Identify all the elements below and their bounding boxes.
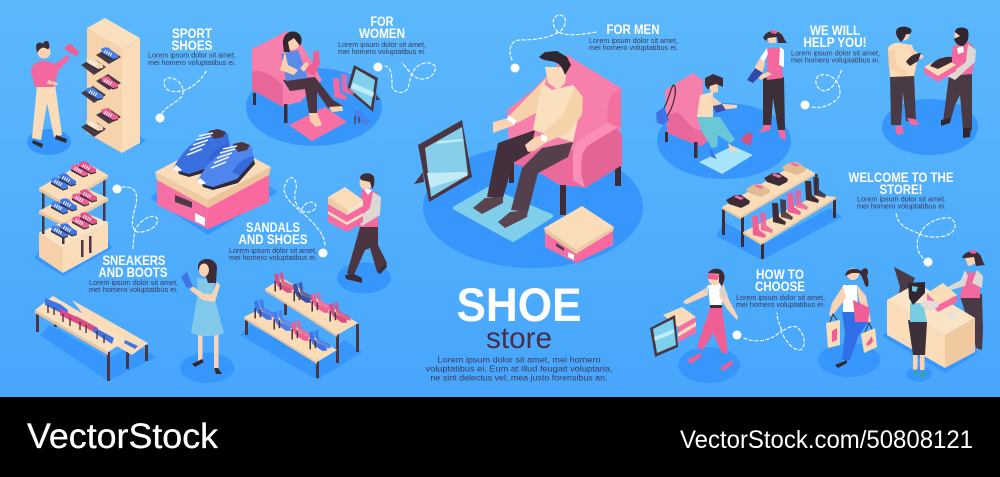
panel: woman trying shoes with assistant [656,30,791,179]
title: SHOE [456,278,582,331]
heading: sneakers and boots [89,253,178,294]
panel: display table with heels [240,272,362,380]
woman seated [280,31,343,127]
rug [455,189,551,240]
panel: sneakers on box [150,129,278,235]
dashed connector: sandals and shoes [284,178,328,258]
cabinet [39,212,108,273]
sales assistant [946,250,985,350]
title: store [486,322,552,355]
heading: for women: mei homero voluptatibus ei. [338,47,426,56]
heading: sneakers and boots: mei homero voluptatibus ei. [89,285,178,294]
dashed connector: for women [374,62,435,92]
heading: welcome to the store: Lorem ipsum dolor sit amet, [857,194,946,204]
brand name: VectorStock [27,417,219,456]
dashed connector: how to choose [732,313,804,350]
dashed connector: for men [510,15,597,72]
panel: checkout counter [882,250,985,382]
dashed connector: sneakers and boots [112,184,157,249]
heading: for women [338,14,426,56]
heading: for men: Lorem ipsum dolor sit amet, [589,36,678,45]
panel: sandals and shoes heading: SANDALS [246,220,300,235]
heading: sport shoes: Lorem ipsum dolor sit amet, [148,50,236,60]
heading: how to choose: mei homero voluptatibus ei. [736,300,825,309]
salesman [941,28,976,138]
heading: we will help you: WE WILL [810,23,860,38]
panel: display table with sandals (left) [35,296,157,381]
heading: sport shoes: SHOES [172,38,212,53]
woman [683,269,738,371]
panel: shoe display rack (right) [716,162,842,260]
panel: two men with shoe box [882,27,978,155]
seated woman [697,74,740,159]
heading: how to choose: Lorem ipsum dolor sit amet, [736,293,825,302]
woman [31,41,79,148]
armchair [507,55,622,215]
heading: for women: FOR [370,14,394,29]
heading: welcome to the store: mei homero voluptatibus ei. [857,202,946,210]
panel: woman in armchair [246,31,382,146]
heading: sport shoes: mei homero voluptatibus ei. [148,58,236,67]
image reference: VectorStock.com/50808121 [680,426,973,454]
heading: welcome to the store: WELCOME TO THE [848,170,954,185]
dashed connector: we will help you [800,69,842,110]
counter [887,283,975,368]
mat [289,107,347,141]
panel: woman at sport shoes shelf [27,18,146,155]
panel: shopper with bags [818,268,880,377]
panel: sandals and shoes heading: AND SHOES [238,232,308,247]
heading: sport shoes: SPORT [172,26,213,41]
armchair [665,73,712,158]
register [894,267,915,303]
mirror [414,120,472,202]
dashed connector: welcome [896,213,955,266]
heading: sneakers and boots: Lorem ipsum dolor sit amet, [89,278,178,287]
heading: we will help you [791,23,880,64]
title [456,278,582,355]
armchair [252,31,322,123]
open shoe box [924,57,956,82]
customer [908,282,940,378]
dashed connector: sport shoes [156,70,207,122]
icon: sneakers [173,129,255,190]
panel: sandals and shoes heading: Lorem ipsum dolor sit amet, [229,246,317,255]
heading: we will help you: mei homero voluptatibus ei. [791,56,880,64]
panel: man in armchair (central) [414,51,643,268]
shoe box on counter [927,283,957,312]
heading: how to choose: HOW TO [756,267,804,282]
heading: for women: Lorem ipsum dolor sit amet, [338,40,426,49]
heading: we will help you: Lorem ipsum dolor sit amet, [791,48,880,58]
heading: we will help you: HELP YOU! [804,35,866,50]
panel: sandals and shoes heading [229,220,317,262]
shop assistant [747,30,787,140]
description text [426,354,612,382]
panel: woman at mirror choosing shoes [650,269,740,383]
customer [888,27,924,135]
footer: watermark bar [0,397,1000,477]
heading: for men: mei homero voluptatibus ei. [589,43,678,52]
heading: how to choose [736,267,825,309]
shoe boxes [663,307,696,342]
icon: handbag [656,85,675,125]
description text: ne sint delectus vel, mea justo forensibus an. [430,372,608,382]
man [345,173,387,283]
heading: for men: FOR MEN [606,22,660,37]
description text: Lorem ipsum dolor sit amet, mei homero [438,354,601,364]
mirror [650,315,678,357]
heading: for men [589,22,678,52]
heading: sneakers and boots: SNEAKERS [102,253,166,268]
description text: voluptatibus ei. Eum at illud feugait voluptaria, [426,364,612,374]
heading: welcome to the store [848,170,954,210]
card terminal [945,311,958,320]
mirror [347,65,380,112]
shoe boxes [328,187,363,232]
shopping bags [826,314,877,353]
panel: sandals and shoes heading: mei homero voluptatibus ei. [229,253,317,262]
heading: sport shoes [148,26,236,67]
heading: welcome to the store: STORE! [880,182,922,197]
shoe shelf unit [81,18,140,153]
man [473,51,583,228]
panel: sneaker rack [34,161,112,276]
heading: how to choose: CHOOSE [755,279,805,294]
heading: sneakers and boots: AND BOOTS [98,265,168,280]
heading: for women: WOMEN [359,26,405,41]
panel: woman in blue dress [180,259,234,383]
shoe box [544,206,614,263]
panel: man carrying boxes [328,173,391,294]
